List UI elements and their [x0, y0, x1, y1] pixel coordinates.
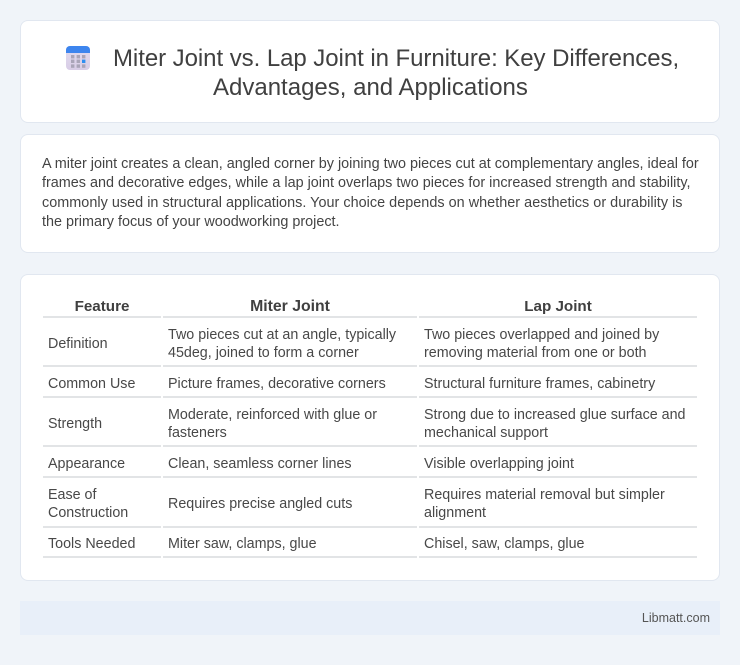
title: Advantages, and Applications	[213, 74, 528, 101]
definition: miter: 45deg, joined to form a corner	[168, 345, 359, 361]
ease: miter: Requires precise angled cuts	[168, 496, 352, 512]
strength: miter	[168, 407, 377, 441]
appearance: lap: Visible overlapping joint	[424, 456, 574, 472]
definition: lap: Two pieces overlapped and joined by	[424, 327, 659, 343]
title	[113, 45, 679, 101]
text: introduction: frames and decorative edges, while a lap joint overlaps two pieces for increased strength and stability,	[42, 175, 690, 191]
row: common use: Common Use	[48, 376, 135, 392]
icon: calendar	[66, 46, 90, 70]
tools: miter: Miter saw, clamps, glue	[168, 536, 317, 552]
panel: introduction	[20, 134, 720, 253]
common use: lap: Structural furniture frames, cabinetry	[424, 376, 655, 392]
table header: miter joint: Miter Joint	[250, 298, 330, 315]
ease: lap	[424, 487, 665, 521]
table header: lap joint: Lap Joint	[524, 298, 592, 315]
title: Miter Joint vs. Lap Joint in Furniture: Key Differences,	[113, 45, 679, 72]
text: introduction: A miter joint creates a clean, angled corner by joining two pieces cut at complementary angles, ideal for	[42, 156, 699, 172]
definition: lap: removing material from one or both	[424, 345, 646, 361]
ease: lap: Requires material removal but simpler	[424, 487, 665, 503]
row: ease of construction	[48, 487, 128, 521]
row: tools needed: Tools Needed	[48, 536, 135, 552]
definition: lap	[424, 327, 660, 361]
row: strength: Strength	[48, 416, 102, 432]
strength: miter: Moderate, reinforced with glue or	[168, 407, 377, 423]
row: appearance: Appearance	[48, 456, 125, 472]
strength: lap	[424, 407, 686, 441]
row: definition: Definition	[48, 336, 108, 352]
table header: feature: Feature	[75, 298, 129, 315]
strength: miter: fasteners	[168, 425, 227, 441]
definition: miter: Two pieces cut at an angle, typically	[168, 327, 396, 343]
footer text: Libmatt.com: Libmatt.com	[642, 611, 710, 625]
text: introduction	[42, 156, 699, 230]
text: introduction: commonly used in structural applications. Your choice depends on whether aesthetics or durability is	[42, 195, 683, 211]
row: ease of construction: Ease of	[48, 487, 96, 503]
footer	[20, 601, 720, 635]
common use: miter: Picture frames, decorative corners	[168, 376, 386, 392]
ease: lap: alignment	[424, 505, 486, 521]
panel: comparison table	[20, 274, 720, 581]
panel: header	[20, 20, 720, 123]
row: ease of construction: Construction	[48, 505, 128, 521]
strength: lap: Strong due to increased glue surface and	[424, 407, 686, 423]
appearance: miter: Clean, seamless corner lines	[168, 456, 352, 472]
definition: miter	[168, 327, 396, 361]
tools: lap: Chisel, saw, clamps, glue	[424, 536, 585, 552]
strength: lap: mechanical support	[424, 425, 548, 441]
text: introduction: the primary focus of your woodworking project.	[42, 214, 340, 230]
